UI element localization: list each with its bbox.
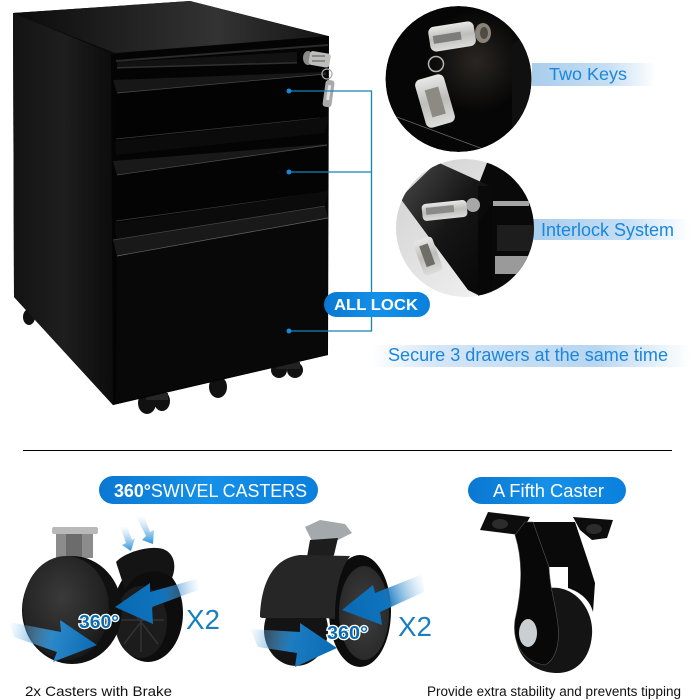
key fob upper [421,200,468,221]
key ring [428,56,444,72]
caster hood [260,555,350,619]
swivel arrow upper [115,578,200,624]
cabinet top panel [13,1,328,53]
cabinet casters [23,309,303,414]
swivel arrow upper [342,574,424,625]
filing cabinet [13,1,335,414]
caster stem [305,520,352,568]
left caster with brake [9,516,200,664]
ALL LOCK pill: ALL LOCK [334,297,418,314]
cabinet side panel [13,13,113,405]
pill: 360 swivel casters [99,476,318,504]
cabinet body underlay [13,1,328,405]
lock and key [303,51,335,108]
drawer 3 [113,206,328,403]
ribbon: Secure 3 drawers: Secure 3 drawers at the same time [388,345,668,365]
X2 left: X2 [186,604,220,635]
right caster [250,520,424,667]
ribbon: Interlock System: Interlock System [541,220,674,240]
ribbon: Two Keys [532,63,656,86]
axle [519,619,537,647]
small down arrows [120,516,154,551]
top rail with lock slot [116,44,328,68]
360 label left: 360° [79,612,119,632]
drawer 2 [113,144,328,240]
bracket bridge and right arm [533,522,595,612]
divider [23,450,672,452]
mounting plates [480,512,613,540]
front wheel [22,556,122,664]
caption: fifth caster: Provide extra stability and prevents tipping [427,684,681,699]
caster stem [52,527,98,558]
detail circle: two keys [386,6,535,160]
fifth caster [480,512,613,673]
360 label right: 360° [327,623,368,643]
wheel face [329,555,391,667]
cabinet front [111,36,329,405]
bracket left arm [514,522,558,665]
key fob lower [415,74,455,128]
ALL LOCK pill [324,292,430,317]
lock cylinder [475,23,491,43]
rear wheel [113,564,183,662]
caption: casters with brake: 2x Casters with Brake [25,683,172,699]
swivel arrow lower [9,620,97,662]
drawer 1 [113,72,328,155]
ribbon: Two Keys: Two Keys [549,64,627,84]
key fob lower [415,236,442,275]
detail circle: interlock system [396,155,540,300]
connector lines [286,88,372,334]
swivel arrow lower [250,623,337,667]
pill: a fifth caster [468,477,626,504]
lower wheel [264,594,328,666]
pill: 360 swivel casters: 360°SWIVEL CASTERS [114,481,307,501]
wheel [516,588,592,673]
X2 right: X2 [398,611,432,642]
key fob upper [427,21,477,52]
pill: a fifth caster: A Fifth Caster [493,481,604,501]
brake lever [116,548,174,590]
